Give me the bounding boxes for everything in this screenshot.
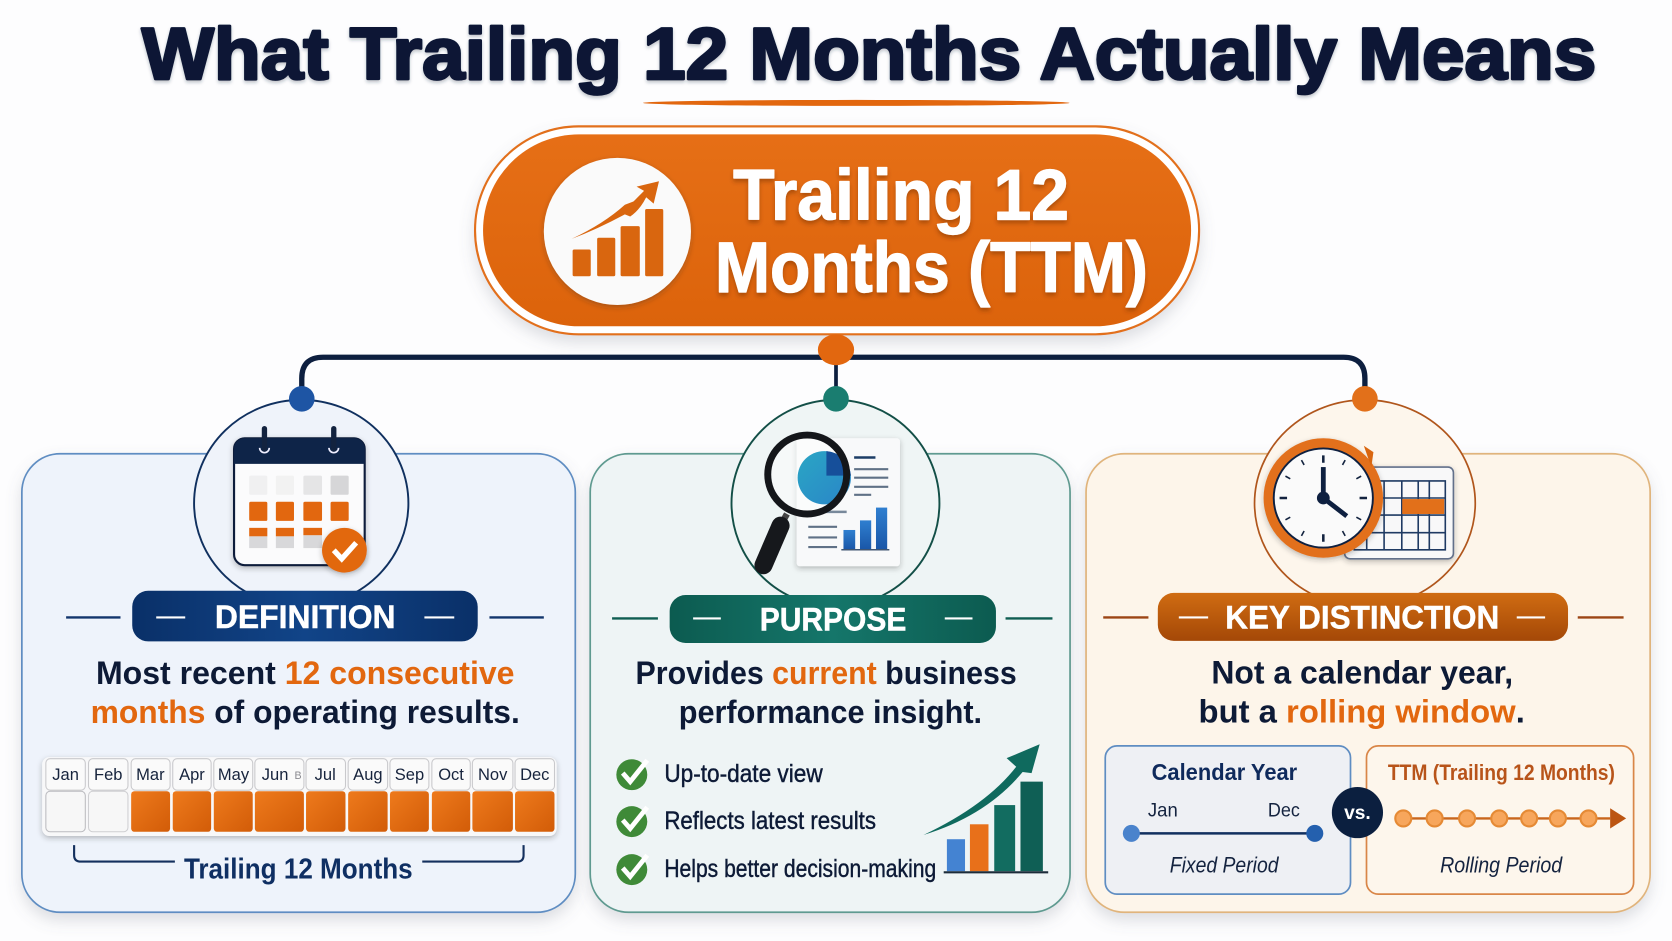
vs badge — [1332, 787, 1383, 838]
comparison box: calendar year: Calendar Year — [1152, 759, 1297, 785]
month labels — [46, 759, 554, 790]
key distinction text — [1199, 655, 1525, 729]
panel: definition — [22, 400, 575, 912]
month strip: B — [294, 770, 302, 782]
purpose label pill — [612, 595, 1052, 643]
month strip: Jan — [52, 765, 79, 784]
month strip: Feb — [94, 765, 122, 784]
comparison box: TTM: TTM (Trailing 12 Months) — [1388, 760, 1615, 785]
month strip: Nov — [478, 765, 508, 784]
connector hub — [818, 334, 854, 365]
hero text — [715, 156, 1148, 308]
icon circle: calendar — [194, 400, 408, 607]
hero pill: Trailing 12 Months (TTM) — [475, 126, 1199, 334]
panel: key distinction — [1086, 400, 1650, 912]
month cells — [46, 791, 554, 832]
bracket: Trailing 12 Months: Trailing 12 Months — [184, 854, 413, 886]
comparison box: TTM: Rolling Period — [1440, 852, 1564, 877]
checklist — [616, 759, 936, 885]
purpose text: Provides current business — [636, 655, 1017, 691]
month strip: Mar — [136, 765, 165, 784]
month strip: Jun — [262, 765, 288, 784]
comparison box: calendar year: Jan — [1148, 800, 1178, 821]
month strip: Dec — [520, 765, 549, 784]
definition label pill — [66, 591, 544, 641]
month strip: May — [218, 765, 250, 784]
bracket: Trailing 12 Months — [74, 845, 524, 886]
panel: purpose — [590, 400, 1070, 912]
title underline accent — [643, 100, 1070, 106]
checklist: Up-to-date view — [664, 761, 823, 788]
month strip: Sep — [395, 765, 424, 784]
key distinction label pill — [1103, 593, 1624, 641]
purpose text — [636, 655, 1017, 730]
icon circle: clock and calendar — [1255, 400, 1475, 607]
definition text: months of operating results. — [91, 694, 520, 730]
connector node: key distinction — [1352, 386, 1378, 412]
definition text — [91, 655, 520, 730]
title: What Trailing 12 Months Actually Means — [142, 12, 1596, 95]
month strip — [42, 757, 557, 836]
definition label pill: DEFINITION — [215, 599, 396, 635]
purpose text: performance insight. — [679, 694, 982, 730]
icon circle: magnifier over report — [732, 400, 939, 607]
vs badge: vs. — [1344, 803, 1371, 824]
month strip: Oct — [438, 765, 464, 784]
growth chart with arrow — [923, 744, 1048, 872]
checklist: Reflects latest results — [664, 808, 876, 835]
key distinction label pill: KEY DISTINCTION — [1225, 600, 1499, 636]
hero text: Months (TTM) — [715, 228, 1148, 308]
checklist: Helps better decision-making — [664, 856, 936, 883]
key distinction text: but a rolling window. — [1199, 693, 1525, 729]
connector node: definition — [289, 386, 315, 412]
comparison box: TTM — [1366, 746, 1634, 894]
month strip: Apr — [179, 765, 205, 784]
month strip: Jul — [315, 765, 336, 784]
key distinction text: Not a calendar year, — [1211, 655, 1513, 691]
icon: rising bar chart — [544, 158, 691, 305]
hero text: Trailing 12 — [733, 156, 1069, 236]
comparison box: calendar year: Fixed Period — [1170, 852, 1280, 877]
definition text: Most recent 12 consecutive — [96, 655, 515, 691]
purpose label pill: PURPOSE — [760, 602, 906, 638]
comparison box: calendar year — [1105, 746, 1351, 894]
connector tree — [302, 357, 1365, 397]
connector node: purpose — [823, 386, 849, 412]
month strip: Aug — [353, 765, 383, 784]
comparison box: calendar year: Dec — [1268, 800, 1300, 821]
